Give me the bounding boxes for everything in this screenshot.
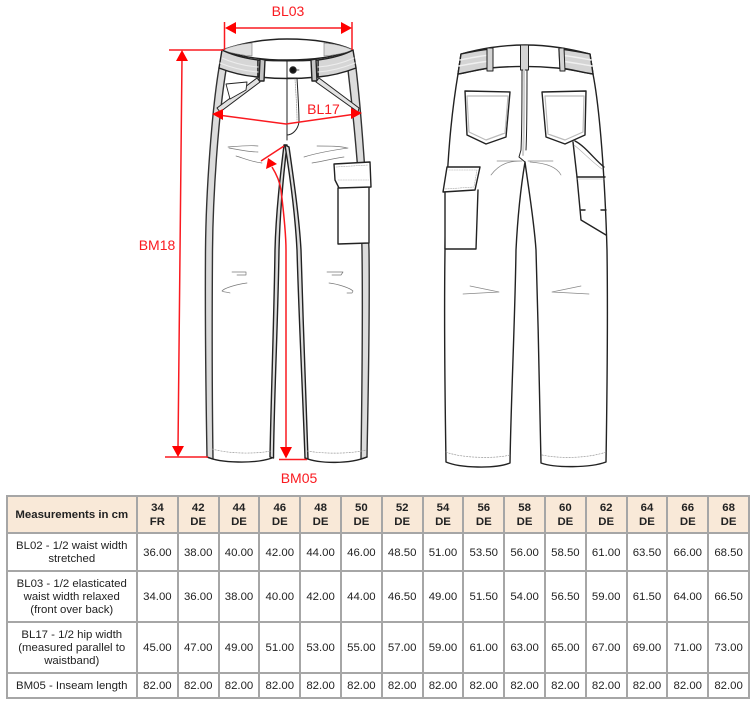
- row BM05: 82.00: [184, 680, 212, 692]
- row BM05: 82.00: [225, 680, 253, 692]
- back hem stitching: [446, 452, 606, 457]
- row BM05: [16, 680, 743, 692]
- row BL03: BL03 - 1/2 elasticated: [17, 578, 127, 590]
- row BL02: 44.00: [306, 547, 335, 559]
- row BL03: 46.50: [388, 591, 416, 603]
- measurement BL03: [224, 3, 352, 50]
- row BL03: 40.00: [266, 591, 294, 603]
- measurement BM18: BM18: [139, 237, 175, 253]
- row BL03: [17, 578, 743, 616]
- row BL02: 56.00: [510, 547, 539, 559]
- row BL17: (measured parallel to: [18, 642, 125, 654]
- table header row: 48: [314, 502, 327, 514]
- back left cargo pocket: [443, 167, 480, 249]
- row BL17: 47.00: [184, 642, 212, 654]
- row BL02: 46.00: [347, 547, 376, 559]
- row BL17: BL17 - 1/2 hip width: [21, 629, 122, 641]
- row BM05: 82.00: [510, 680, 539, 692]
- row BL02: 51.00: [429, 547, 457, 559]
- row BL17: [18, 629, 743, 667]
- table header row: 64: [641, 502, 653, 514]
- table header row: DE: [394, 516, 410, 528]
- front cargo pocket: [334, 162, 371, 244]
- row BL17: 69.00: [633, 642, 661, 654]
- row BL02: 48.50: [388, 547, 416, 559]
- row BL03: 38.00: [225, 591, 253, 603]
- row BM05: 82.00: [633, 680, 661, 692]
- table header row: DE: [313, 516, 328, 528]
- row BL17: 73.00: [714, 642, 743, 654]
- row BL17: 61.00: [470, 642, 498, 654]
- row BL02: 38.00: [184, 547, 212, 559]
- table header row: DE: [231, 516, 247, 528]
- row BL02: 40.00: [225, 547, 253, 559]
- row BM05: 82.00: [674, 680, 702, 692]
- row BL03: (front over back): [30, 604, 113, 616]
- measurement BL03: BL03: [272, 3, 305, 19]
- row BL17: 59.00: [429, 642, 457, 654]
- back outer and inner leg lines: [445, 74, 607, 467]
- row BL03: 49.00: [429, 591, 457, 603]
- measurement BL17: [212, 101, 362, 124]
- row BL02: 42.00: [266, 547, 294, 559]
- row BM05: 82.00: [429, 680, 457, 692]
- row BM05: BM05 - Inseam length: [16, 680, 127, 692]
- back view of trousers: [443, 45, 607, 467]
- row BM05: 82.00: [306, 680, 335, 692]
- row BL17: 63.00: [510, 642, 539, 654]
- row BL03: 61.50: [633, 591, 661, 603]
- row BL03: 59.00: [592, 591, 620, 603]
- back right side pocket: [573, 141, 606, 235]
- row BL03: 42.00: [306, 591, 335, 603]
- row BL02: 68.50: [714, 547, 743, 559]
- row BM05: 82.00: [551, 680, 580, 692]
- table header row: 58: [518, 502, 531, 514]
- back creases: [463, 161, 589, 294]
- row BL02: 66.00: [674, 547, 702, 559]
- row BM05: 82.00: [470, 680, 498, 692]
- row BL03: 51.50: [470, 591, 498, 603]
- row BL03: 66.50: [714, 591, 743, 603]
- table header row: DE: [557, 516, 573, 528]
- measurement BL17: BL17: [307, 101, 340, 117]
- row BL02: 53.50: [470, 547, 498, 559]
- row BL03: 54.00: [510, 591, 539, 603]
- size chart table: [6, 495, 750, 699]
- table header row: 42: [192, 502, 205, 514]
- row BL17: 67.00: [592, 642, 620, 654]
- table header row: DE: [721, 516, 736, 528]
- back pockets: [465, 91, 510, 144]
- back belt loops: [487, 45, 565, 71]
- row BM05: 82.00: [388, 680, 416, 692]
- row BL17: 55.00: [347, 642, 376, 654]
- measurement BM18: [139, 50, 223, 457]
- table header row: 44: [233, 502, 245, 514]
- row BM05: 82.00: [143, 680, 172, 692]
- row BL17: 65.00: [551, 642, 580, 654]
- row BM05: 82.00: [714, 680, 743, 692]
- table header row: DE: [353, 516, 369, 528]
- table header row: 50: [355, 502, 368, 514]
- table header row: 52: [396, 502, 409, 514]
- table header row: 46: [273, 502, 286, 514]
- front slant pockets: [217, 78, 260, 112]
- row BL03: 34.00: [143, 591, 172, 603]
- row BL02: 36.00: [143, 547, 172, 559]
- row BL17: 45.00: [143, 642, 172, 654]
- back centre seam: [519, 70, 527, 162]
- table header row: 54: [437, 502, 449, 514]
- front waistband: [222, 39, 353, 60]
- table header row: DE: [190, 516, 206, 528]
- table header row: [8, 497, 748, 692]
- row BL17: 49.00: [225, 642, 253, 654]
- row BL17: 71.00: [674, 642, 702, 654]
- row BL02: 58.50: [551, 547, 580, 559]
- row BL02: 61.00: [592, 547, 620, 559]
- table header row: 66: [681, 502, 694, 514]
- front side stripes: [205, 68, 226, 459]
- table header row: DE: [476, 516, 492, 528]
- table header row: DE: [639, 516, 655, 528]
- front creases: [222, 146, 353, 293]
- table header row: Measurements in cm: [15, 509, 128, 521]
- table header row: 56: [477, 502, 490, 514]
- fly and button: [287, 60, 299, 140]
- front view of trousers: [205, 39, 371, 462]
- row BL17: 57.00: [388, 642, 416, 654]
- row BM05: 82.00: [592, 680, 620, 692]
- table header row: DE: [435, 516, 451, 528]
- table header row: 68: [722, 502, 735, 514]
- row BL02: stretched: [48, 553, 95, 565]
- row BL03: 44.00: [347, 591, 376, 603]
- front inner leg seams: [270, 145, 287, 458]
- row BM05: 82.00: [347, 680, 376, 692]
- table header row: 60: [559, 502, 572, 514]
- row BL03: 36.00: [184, 591, 212, 603]
- belt loops: [259, 59, 265, 81]
- table header row: DE: [272, 516, 288, 528]
- row BM05: 82.00: [266, 680, 294, 692]
- table header row: DE: [680, 516, 696, 528]
- back waistband: [458, 45, 593, 74]
- front hems: [207, 457, 367, 462]
- row BL02: 63.50: [633, 547, 661, 559]
- table header row: 34: [151, 502, 164, 514]
- row BL03: waist width relaxed: [24, 591, 120, 603]
- measurement BM05: [261, 146, 317, 486]
- row BL17: waistband): [44, 655, 99, 667]
- row BL03: 64.00: [674, 591, 702, 603]
- table header row: FR: [150, 516, 165, 528]
- row BL17: 51.00: [266, 642, 294, 654]
- technical drawing of trousers with measurements: [139, 3, 608, 486]
- table header row: 62: [600, 502, 612, 514]
- row BL02: [16, 540, 743, 565]
- row BL02: BL02 - 1/2 waist width: [16, 540, 127, 552]
- row BL03: 56.50: [551, 591, 580, 603]
- table header row: DE: [517, 516, 532, 528]
- table header row: DE: [598, 516, 614, 528]
- row BL17: 53.00: [306, 642, 335, 654]
- measurement BM05: BM05: [281, 470, 317, 486]
